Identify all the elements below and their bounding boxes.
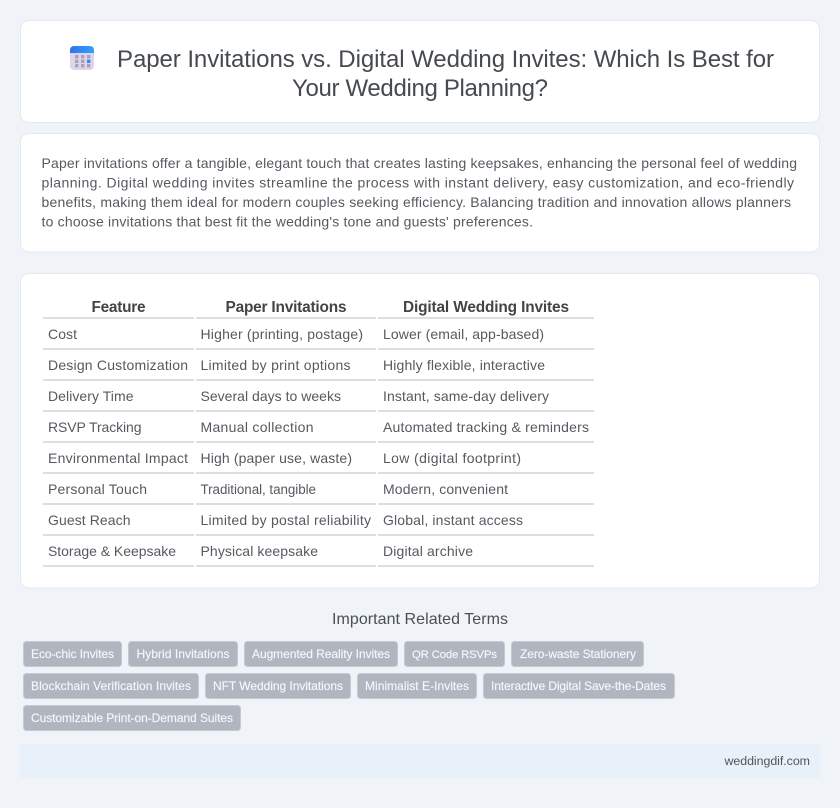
table row: storage and keepsake: Storage & Keepsake — [48, 543, 176, 559]
tag — [484, 674, 674, 698]
table row: design customization: Highly flexible, interactive — [383, 357, 545, 373]
tag — [24, 642, 122, 666]
text block: introduction paragraph: to choose invitations that best fit the wedding's tone and guests' preferences. — [42, 214, 533, 230]
tag — [244, 642, 398, 666]
table row: environmental impact: Environmental Impact — [48, 450, 188, 466]
footer: weddingdif.com — [724, 754, 810, 768]
tag: Interactive Digital Save-the-Dates — [491, 679, 666, 693]
tag — [512, 642, 644, 666]
table row: personal touch — [43, 481, 594, 505]
text block: introduction paragraph: Paper invitations offer a tangible, elegant touch that creates lasting keepsakes, enhancing the personal feel of wedding — [42, 155, 797, 171]
table row: storage and keepsake: Digital archive — [383, 543, 473, 559]
table row: guest reach — [43, 512, 594, 536]
table row: environmental impact: Low (digital footprint) — [383, 450, 521, 466]
table row: cost: Cost — [48, 326, 77, 342]
table header row: Feature — [92, 299, 146, 316]
title — [117, 46, 774, 102]
table row: design customization: Design Customization — [48, 357, 188, 373]
tag — [404, 642, 504, 666]
table row: storage and keepsake: Physical keepsake — [200, 543, 318, 559]
tag: Zero-waste Stationery — [520, 647, 636, 661]
table header row: Paper Invitations — [226, 299, 346, 316]
table row: delivery time — [43, 388, 594, 412]
table row: RSVP tracking: Automated tracking & reminders — [383, 419, 589, 435]
table row: storage and keepsake — [43, 543, 594, 567]
table row: RSVP tracking: Manual collection — [200, 419, 314, 435]
table header row: Digital Wedding Invites — [403, 299, 569, 316]
table row: delivery time: Delivery Time — [48, 388, 134, 404]
table header row — [43, 299, 594, 319]
table row: environmental impact — [43, 450, 594, 474]
tag: Hybrid Invitations — [136, 647, 230, 661]
table row: personal touch: Modern, convenient — [383, 481, 508, 497]
table row: RSVP tracking — [43, 419, 594, 443]
tag: Blockchain Verification Invites — [31, 679, 191, 693]
table row: delivery time: Instant, same-day delivery — [383, 388, 549, 404]
tag — [24, 706, 240, 730]
footer — [20, 744, 820, 778]
table row: design customization — [43, 357, 594, 381]
table row: guest reach: Guest Reach — [48, 512, 130, 528]
table row: personal touch: Traditional, tangible — [200, 482, 316, 497]
tag — [24, 674, 198, 698]
panel: introduction — [20, 134, 820, 252]
table row: environmental impact: High (paper use, waste) — [200, 450, 352, 466]
table row: guest reach: Global, instant access — [383, 512, 523, 528]
tag — [206, 674, 350, 698]
tag list: related terms — [24, 642, 674, 730]
table row: delivery time: Several days to weeks — [200, 388, 341, 404]
tag: QR Code RSVPs — [412, 649, 497, 661]
panel: title card — [20, 20, 820, 122]
tag: Eco-chic Invites — [31, 647, 114, 661]
text block: introduction paragraph: benefits, making them ideal for modern couples seeking efficiency. Balancing tradition and innovation allows planners — [42, 194, 791, 210]
text block: introduction paragraph: planning. Digital wedding invites streamline the process with instant delivery, easy customization, and eco-friendly — [42, 174, 794, 190]
table row: cost: Higher (printing, postage) — [200, 326, 363, 342]
panel: comparison table — [20, 274, 820, 588]
table row: guest reach: Limited by postal reliability — [200, 512, 371, 528]
icon: calendar — [70, 46, 94, 70]
tag: Minimalist E-Invites — [365, 679, 469, 693]
tag: NFT Wedding Invitations — [213, 679, 343, 693]
table row: cost — [43, 326, 594, 350]
table row: RSVP tracking: RSVP Tracking — [48, 419, 142, 435]
table row: personal touch: Personal Touch — [48, 481, 147, 497]
title: Your Wedding Planning? — [292, 75, 548, 102]
table row: cost: Lower (email, app-based) — [383, 326, 544, 342]
table row: design customization: Limited by print options — [200, 357, 350, 373]
tag — [358, 674, 476, 698]
heading: important related terms: Important Related Terms — [332, 611, 508, 628]
tag: Augmented Reality Invites — [252, 647, 390, 661]
text block: introduction paragraph — [42, 155, 797, 230]
title: Paper Invitations vs. Digital Wedding Invites: Which Is Best for — [117, 46, 774, 73]
tag — [128, 642, 238, 666]
tag: Customizable Print-on-Demand Suites — [31, 711, 233, 725]
